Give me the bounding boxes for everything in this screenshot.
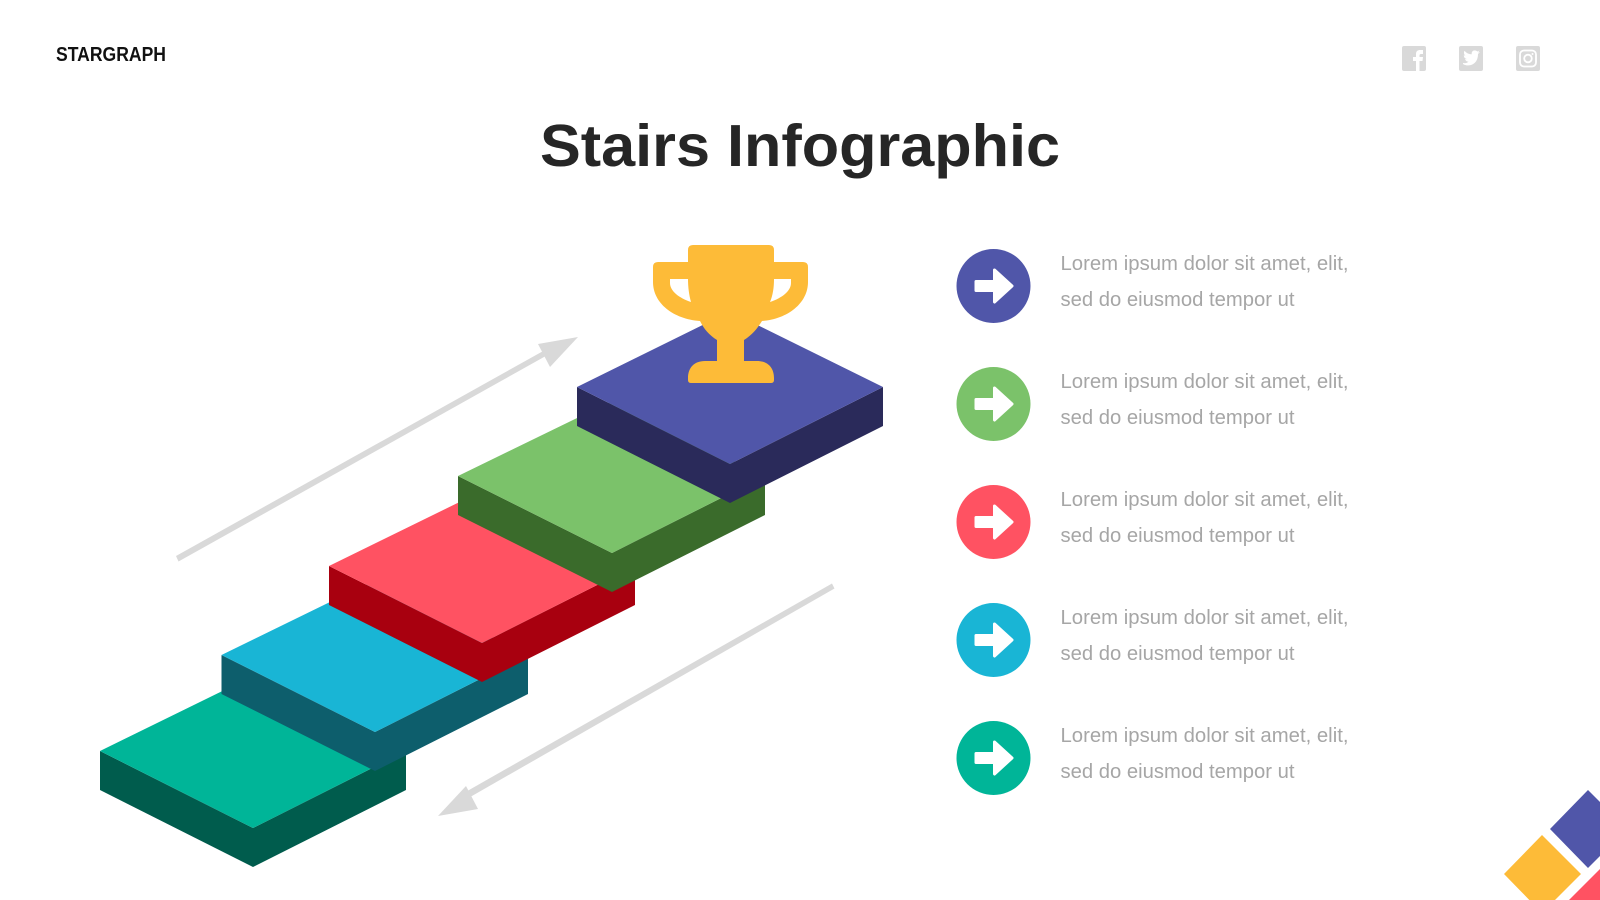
text block 3: sed do eiusmod tempor ut bbox=[1060, 525, 1295, 547]
arrow: downward bbox=[438, 584, 834, 816]
text block 4: Lorem ipsum dolor sit amet, elit, bbox=[1060, 607, 1348, 629]
item 4 bbox=[956, 603, 1348, 677]
brand logo: STARGRAPH bbox=[56, 44, 166, 66]
icon: purple arrow circle bbox=[956, 249, 1030, 323]
icon: teal arrow circle bbox=[956, 721, 1030, 795]
icon: red arrow circle bbox=[956, 485, 1030, 559]
arrow: upward bbox=[176, 337, 578, 562]
icon: instagram bbox=[1516, 46, 1540, 71]
text block 1: Lorem ipsum dolor sit amet, elit, bbox=[1060, 253, 1348, 275]
step 1: purple bbox=[577, 312, 883, 503]
corner decoration bbox=[1504, 790, 1600, 900]
item 1 bbox=[956, 249, 1348, 323]
text block 2: sed do eiusmod tempor ut bbox=[1060, 407, 1295, 429]
title: Stairs Infographic bbox=[540, 113, 1060, 179]
icon: green arrow circle bbox=[956, 367, 1030, 441]
step 3: red bbox=[329, 491, 635, 682]
icon: trophy bbox=[653, 245, 808, 383]
social icons bbox=[1402, 46, 1540, 71]
text block 3: Lorem ipsum dolor sit amet, elit, bbox=[1060, 489, 1348, 511]
icon: twitter bbox=[1459, 46, 1483, 71]
icon: facebook bbox=[1402, 46, 1426, 71]
text block 5: sed do eiusmod tempor ut bbox=[1060, 761, 1295, 783]
icon: blue arrow circle bbox=[956, 603, 1030, 677]
text block 5: Lorem ipsum dolor sit amet, elit, bbox=[1060, 725, 1348, 747]
step 5: teal bbox=[100, 676, 406, 867]
item 5 bbox=[956, 721, 1348, 795]
isometric stairs bbox=[100, 312, 883, 867]
step 2: green bbox=[458, 401, 765, 592]
step 4: blue bbox=[222, 580, 528, 771]
text block 1: sed do eiusmod tempor ut bbox=[1060, 289, 1295, 311]
text block 2: Lorem ipsum dolor sit amet, elit, bbox=[1060, 371, 1348, 393]
item 2 bbox=[956, 367, 1348, 441]
item 3 bbox=[956, 485, 1348, 559]
text block 4: sed do eiusmod tempor ut bbox=[1060, 643, 1295, 665]
